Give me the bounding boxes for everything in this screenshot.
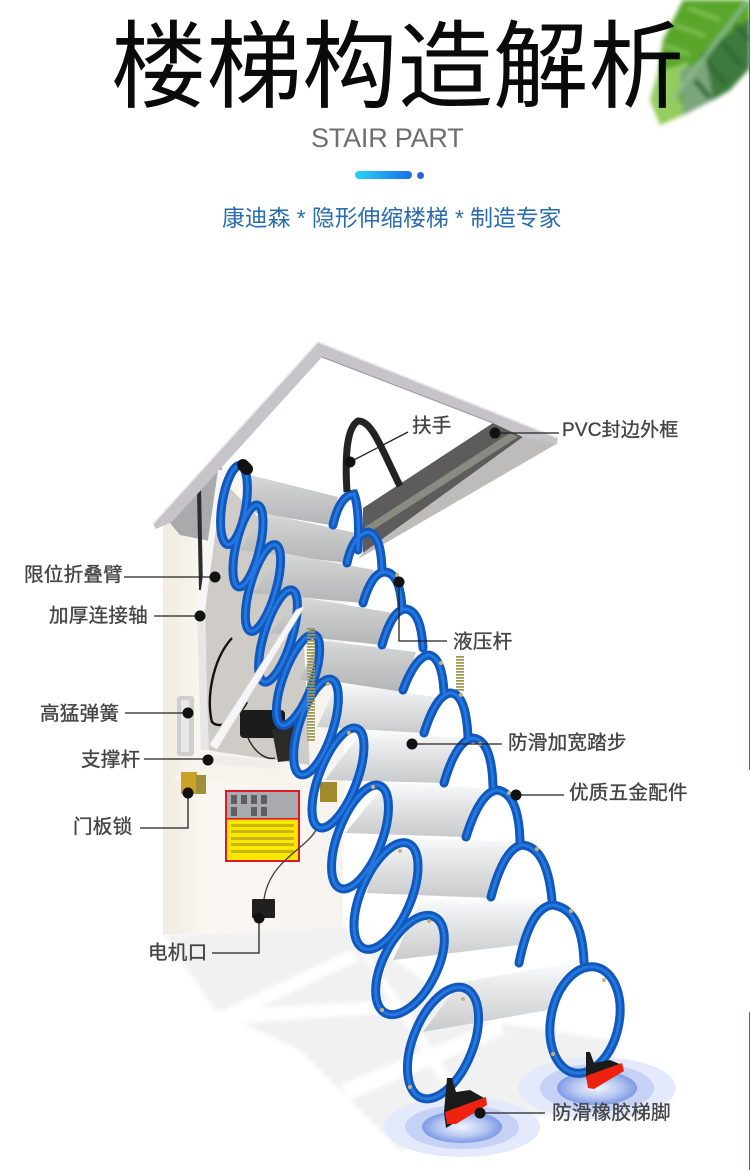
leader: 加厚连接轴 <box>154 610 206 622</box>
stair treads <box>240 475 573 1032</box>
horizontal support bar <box>212 755 276 769</box>
ground ripple: front <box>384 1097 540 1157</box>
leader: 高猛弹簧 <box>125 708 194 718</box>
label: 防滑加宽踏步: 防滑加宽踏步 <box>508 732 627 754</box>
door lock <box>181 772 337 802</box>
floor shadow <box>160 925 640 1150</box>
label: 加厚连接轴: 加厚连接轴 <box>49 605 148 627</box>
label: 限位折叠臂: 限位折叠臂 <box>24 564 123 586</box>
label: 门板锁: 门板锁 <box>73 816 132 838</box>
title: 楼梯构造解析 <box>111 15 684 121</box>
warning sticker <box>226 791 299 861</box>
wall panel <box>163 465 345 935</box>
white support bar <box>209 606 305 750</box>
decorative pill and dot <box>355 171 424 179</box>
leader: 支撑杆 <box>144 754 214 766</box>
tagline: 康迪森 * 隐形伸缩楼梯 * 制造专家 <box>222 205 561 231</box>
leader: 电机口 <box>212 912 264 953</box>
left folding rings <box>216 464 629 1109</box>
leader: 限位折叠臂 <box>124 572 220 582</box>
label: PVC封边外框: PVC封边外框 <box>562 420 678 441</box>
ground ripple: rear <box>518 1057 676 1119</box>
label: 防滑橡胶梯脚: 防滑橡胶梯脚 <box>552 1102 671 1124</box>
label: 优质五金配件: 优质五金配件 <box>569 782 688 804</box>
leader: 防滑橡胶梯脚 <box>474 1108 545 1118</box>
motor <box>240 710 296 762</box>
black cable <box>210 638 247 725</box>
leader: 扶手 <box>344 432 408 468</box>
right edge line <box>749 0 750 1170</box>
motor port box and wire <box>252 830 316 918</box>
leader: 液压杆 <box>394 576 447 641</box>
door frame <box>153 342 558 559</box>
leader: 优质五金配件 <box>510 790 564 800</box>
handrail <box>346 421 400 492</box>
leader: 防滑加宽踏步 <box>406 738 502 750</box>
spring: rear <box>456 656 464 692</box>
rubber foot: rear <box>586 1052 624 1089</box>
label: 电机口: 电机口 <box>148 942 207 964</box>
rubber foot: front <box>444 1078 487 1128</box>
support rod and hydraulic strut <box>177 470 224 756</box>
label: 支撑杆: 支撑杆 <box>81 749 140 771</box>
hinge bolts <box>326 573 606 1089</box>
right arches <box>333 494 584 963</box>
leader: PVC封边外框 <box>490 428 559 438</box>
label: 扶手: 扶手 <box>412 415 452 437</box>
subtitle: STAIR PART: STAIR PART <box>311 123 464 153</box>
label: 高猛弹簧: 高猛弹簧 <box>40 703 119 725</box>
label: 液压杆: 液压杆 <box>453 631 512 653</box>
leader: 门板锁 <box>140 788 194 828</box>
spring: front <box>307 628 315 742</box>
